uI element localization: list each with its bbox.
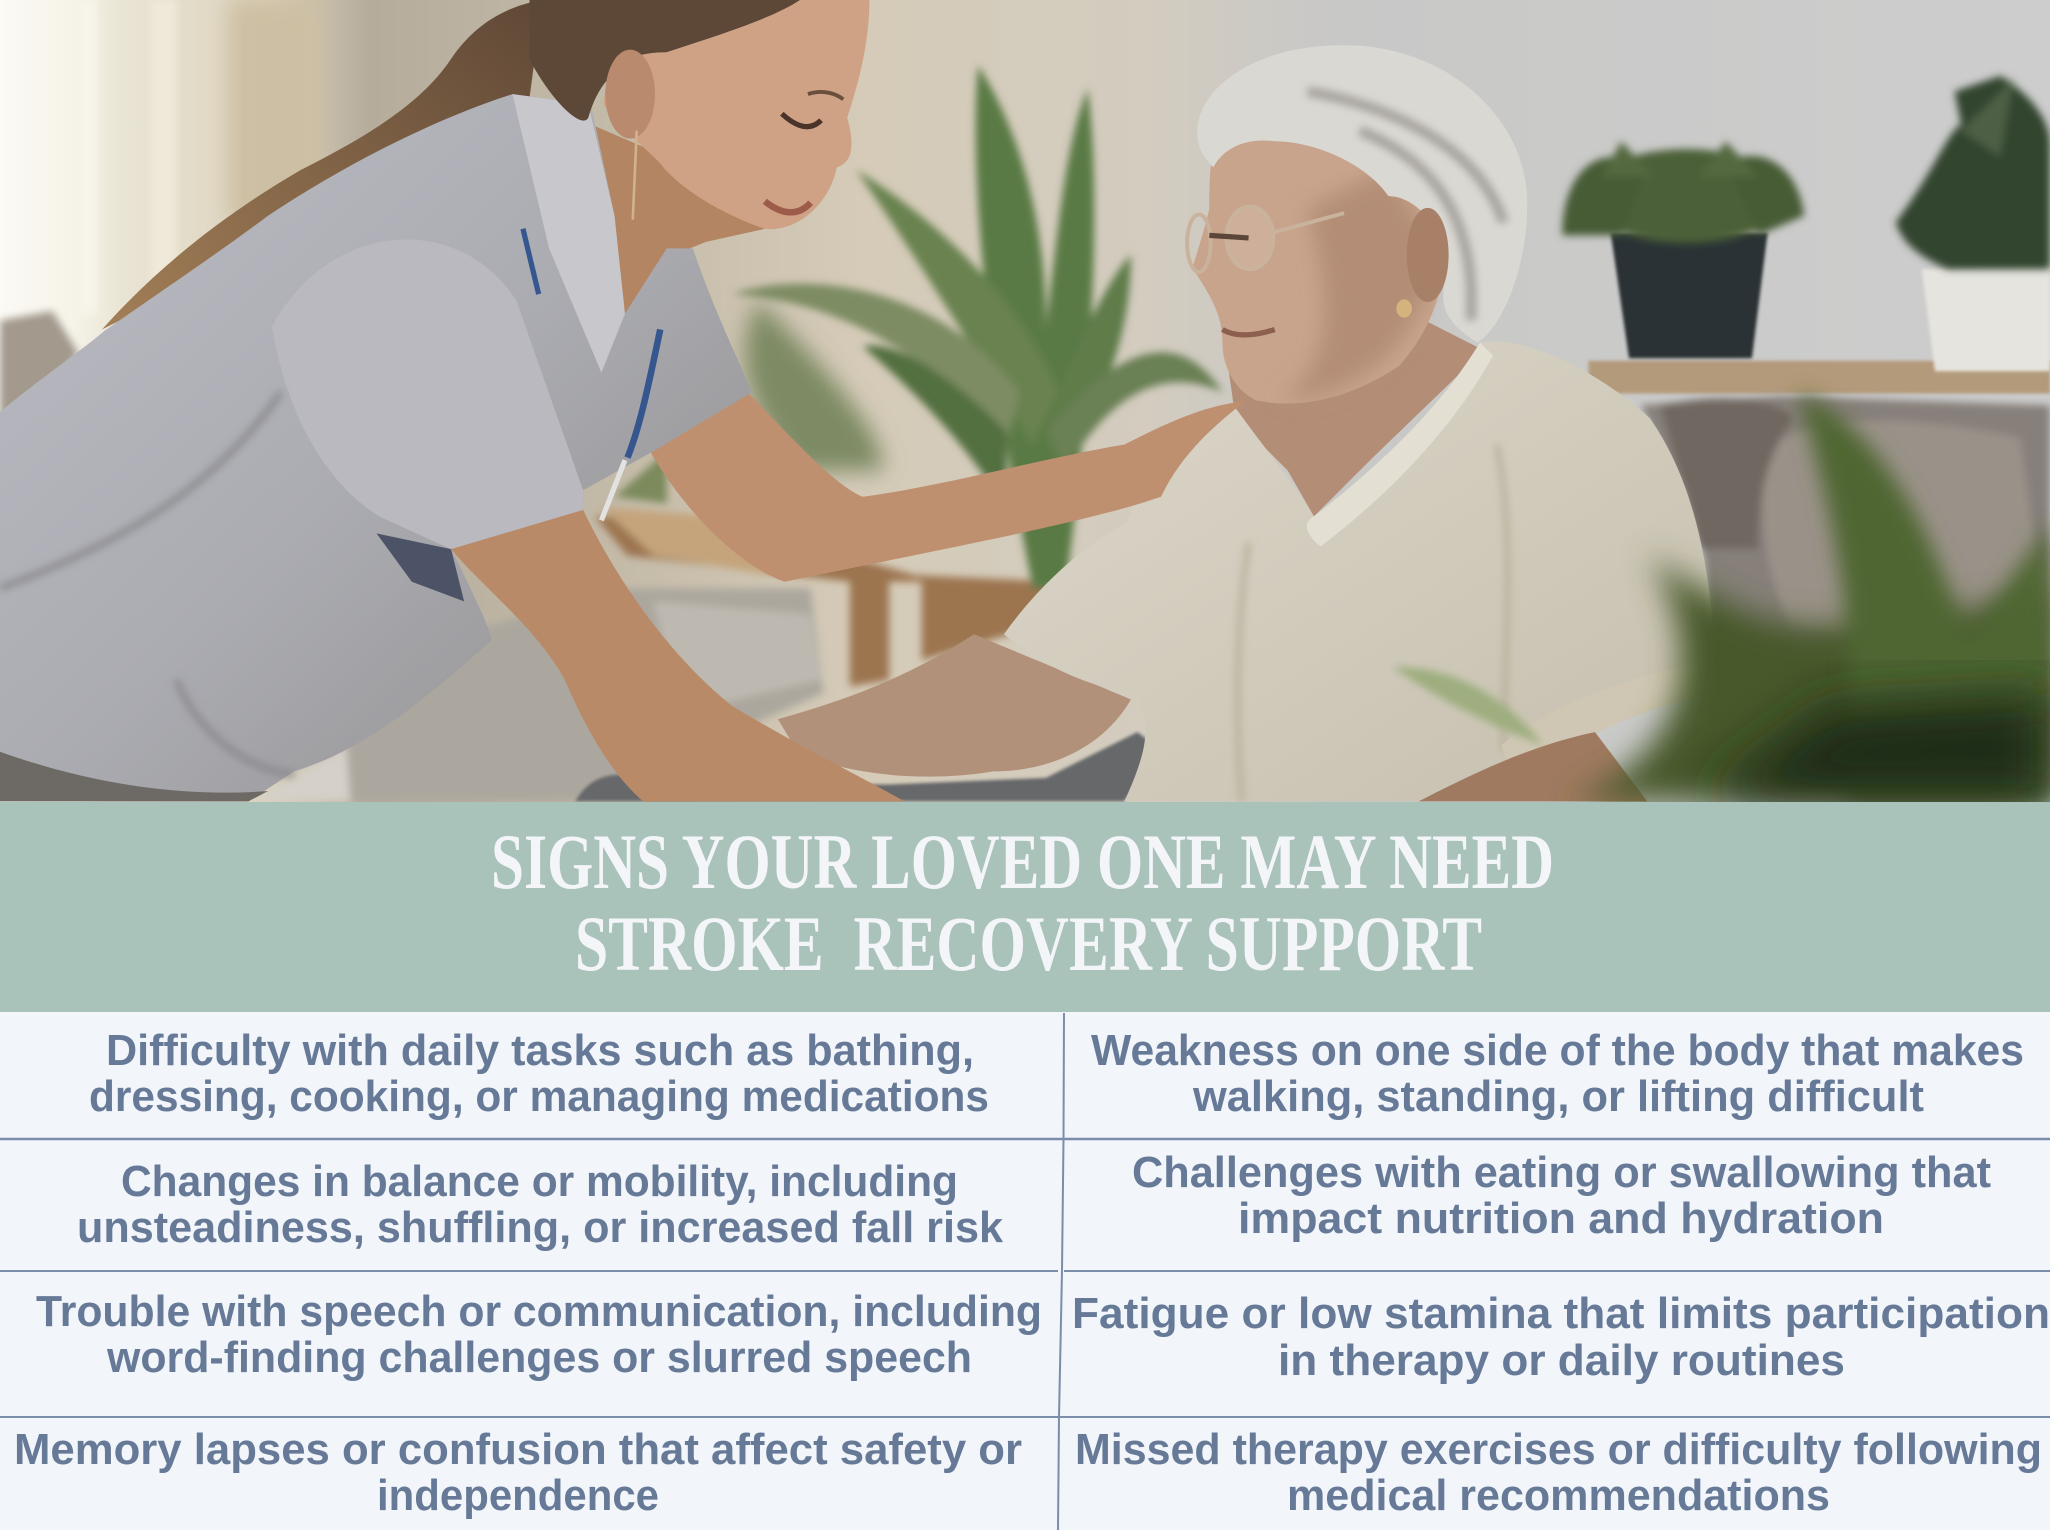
sign: missed therapy: medical recommendations xyxy=(1287,1471,1830,1520)
sign: fatigue: in therapy or daily routines xyxy=(1278,1336,1845,1385)
face xyxy=(1194,140,1438,404)
sign: balance and mobility: Changes in balance or mobility, including xyxy=(121,1157,958,1206)
room background xyxy=(0,0,2050,803)
title xyxy=(491,818,1554,987)
lanyard xyxy=(628,329,660,458)
sign: daily tasks xyxy=(89,1026,989,1121)
smile xyxy=(765,201,811,212)
title: SIGNS YOUR LOVED ONE MAY NEED xyxy=(491,818,1554,905)
lap xyxy=(575,732,1164,801)
sign: daily tasks: Difficulty with daily tasks such as bathing, xyxy=(106,1026,974,1075)
hair cap xyxy=(529,0,800,121)
background plant xyxy=(614,65,1222,588)
wall shelf with plants xyxy=(1562,76,2050,394)
sign: memory lapses: independence xyxy=(377,1471,659,1520)
dark leaf plant xyxy=(1896,76,2050,269)
middle sofa xyxy=(248,588,824,801)
ear xyxy=(1407,208,1449,302)
sign: balance and mobility: unsteadiness, shuffling, or increased fall risk xyxy=(77,1203,1004,1252)
sign: eating and swallowing xyxy=(1132,1148,1991,1243)
neck xyxy=(575,118,765,333)
sign: daily tasks: dressing, cooking, or managing medications xyxy=(89,1072,989,1121)
sign: memory lapses xyxy=(14,1425,1022,1520)
elderly woman xyxy=(575,45,1715,801)
right sofa cushions xyxy=(1641,396,2050,732)
glasses xyxy=(1187,207,1344,272)
blurred foreground plant xyxy=(1392,392,2050,801)
mouth xyxy=(1222,329,1275,335)
photo: nurse comforting an elderly woman at home xyxy=(0,0,2050,803)
sign: one-sided weakness: Weakness on one side of the body that makes xyxy=(1091,1026,2024,1075)
earring xyxy=(633,131,637,220)
sign: speech and communication xyxy=(36,1287,1042,1382)
sign: speech and communication: word-finding challenges or slurred speech xyxy=(106,1333,972,1382)
sign: speech and communication: Trouble with speech or communication, including xyxy=(36,1287,1042,1336)
sign: balance and mobility xyxy=(77,1157,1004,1252)
sign: missed therapy: Missed therapy exercises or difficulty following xyxy=(1075,1425,2042,1474)
sign: memory lapses: Memory lapses or confusion that affect safety or xyxy=(14,1425,1022,1474)
ear xyxy=(605,50,655,139)
sign: one-sided weakness: walking, standing, or lifting difficult xyxy=(1192,1072,1924,1121)
sign: fatigue xyxy=(1072,1289,2050,1385)
table of warning signs xyxy=(0,1012,2050,1530)
sign: one-sided weakness xyxy=(1091,1026,2024,1121)
trousers xyxy=(0,752,268,801)
badge strap xyxy=(377,533,464,601)
sign: eating and swallowing: Challenges with eating or swallowing that xyxy=(1132,1148,1991,1197)
shirt fold lines xyxy=(0,392,294,774)
uniform xyxy=(0,94,752,801)
reaching arm xyxy=(650,392,1245,582)
sweater xyxy=(1004,341,1715,801)
white pot xyxy=(1922,264,2050,371)
left sofa xyxy=(0,311,78,418)
ponytail xyxy=(102,0,543,329)
neck xyxy=(1229,307,1484,516)
collar xyxy=(513,94,625,373)
eye xyxy=(1209,235,1249,238)
lanyard lower card xyxy=(601,460,625,520)
sign: eating and swallowing: impact nutrition and hydration xyxy=(1238,1194,1884,1243)
sweater V-neck trim xyxy=(1307,343,1493,546)
arm xyxy=(778,634,1131,777)
sleeve xyxy=(272,240,583,549)
eye xyxy=(782,114,821,127)
front arm xyxy=(451,510,905,801)
sleeve cuff xyxy=(1501,690,1682,753)
sleeve shadow xyxy=(1238,445,1508,801)
sign: missed therapy xyxy=(1075,1425,2042,1520)
hair shadow strands xyxy=(1307,92,1504,320)
nurse xyxy=(0,0,1245,801)
earring xyxy=(1396,299,1412,318)
wooden side table xyxy=(595,507,1059,686)
potted plant xyxy=(1562,141,1804,243)
heading band xyxy=(0,802,2050,1013)
face shading xyxy=(1281,170,1438,399)
sign: fatigue: Fatigue or low stamina that limits participation xyxy=(1072,1289,2050,1338)
title: STROKE RECOVERY SUPPORT xyxy=(575,900,1482,987)
dark pot xyxy=(1611,233,1768,358)
eyebrow xyxy=(808,92,843,99)
face xyxy=(604,0,869,229)
hair xyxy=(1197,45,1527,343)
other hand xyxy=(1419,732,1647,801)
